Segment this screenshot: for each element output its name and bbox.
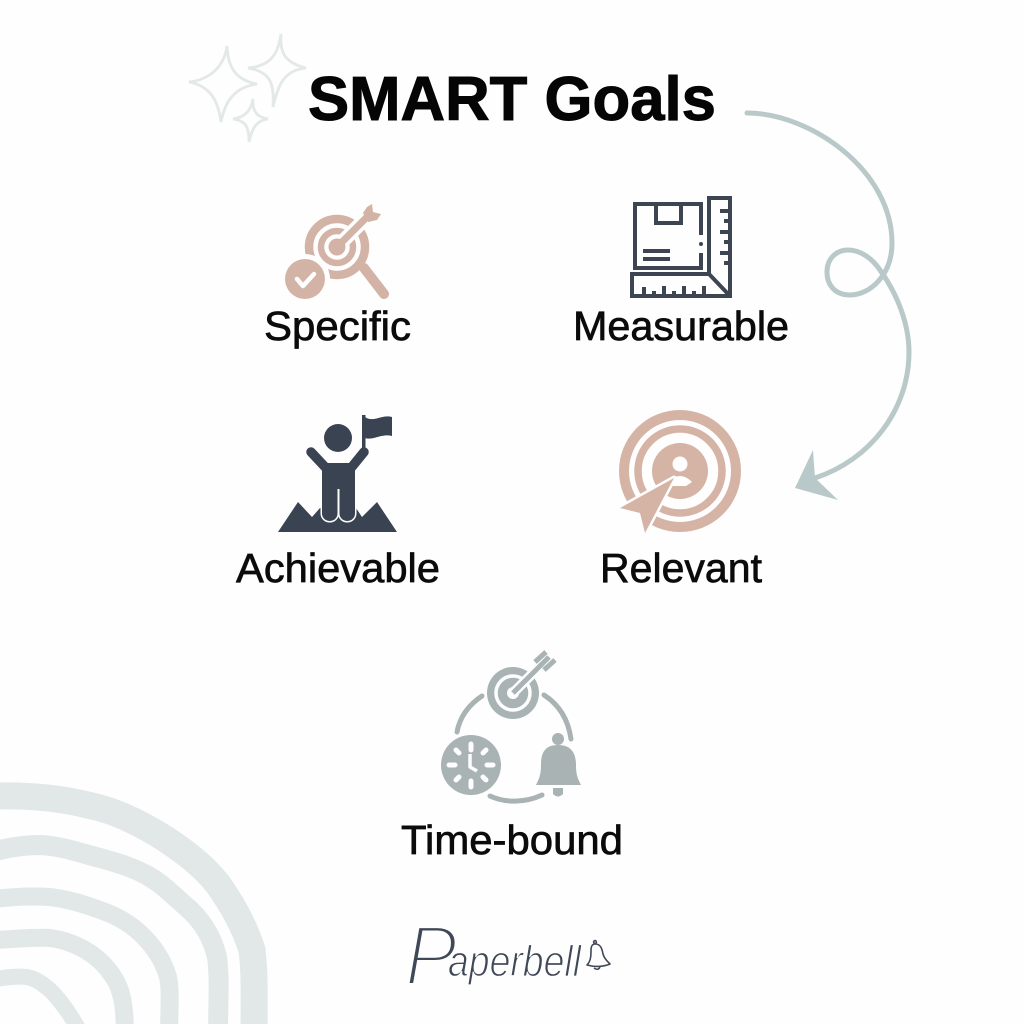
icon: person with flag on mountain [278, 415, 397, 532]
logo: Paperbell wordmark with bell [405, 909, 610, 1004]
label: Achievable: Achievable [236, 545, 440, 591]
label: Time-bound: Time-bound [401, 817, 623, 863]
curved arrow [747, 113, 909, 500]
label: Specific: Specific [264, 303, 411, 349]
decorative swirl: concentric rings bottom left [0, 796, 254, 1024]
decorative sparkles beside title [189, 34, 306, 142]
label: Relevant: Relevant [600, 545, 763, 591]
title: SMART Goals [308, 65, 716, 134]
label: Measurable: Measurable [573, 303, 789, 349]
icon: time-bound cycle of target, clock and bell [441, 652, 581, 801]
icon: relevant target with cursor arrow [620, 415, 736, 533]
icon: measurable box and ruler [632, 198, 730, 296]
logo: Paperbell wordmark with bell: P [405, 909, 457, 1004]
icon: specific target with magnifier [280, 204, 384, 304]
logo: Paperbell wordmark with bell: aperbell [448, 937, 582, 986]
icon: small bell [587, 941, 610, 969]
arrowhead [795, 450, 838, 500]
